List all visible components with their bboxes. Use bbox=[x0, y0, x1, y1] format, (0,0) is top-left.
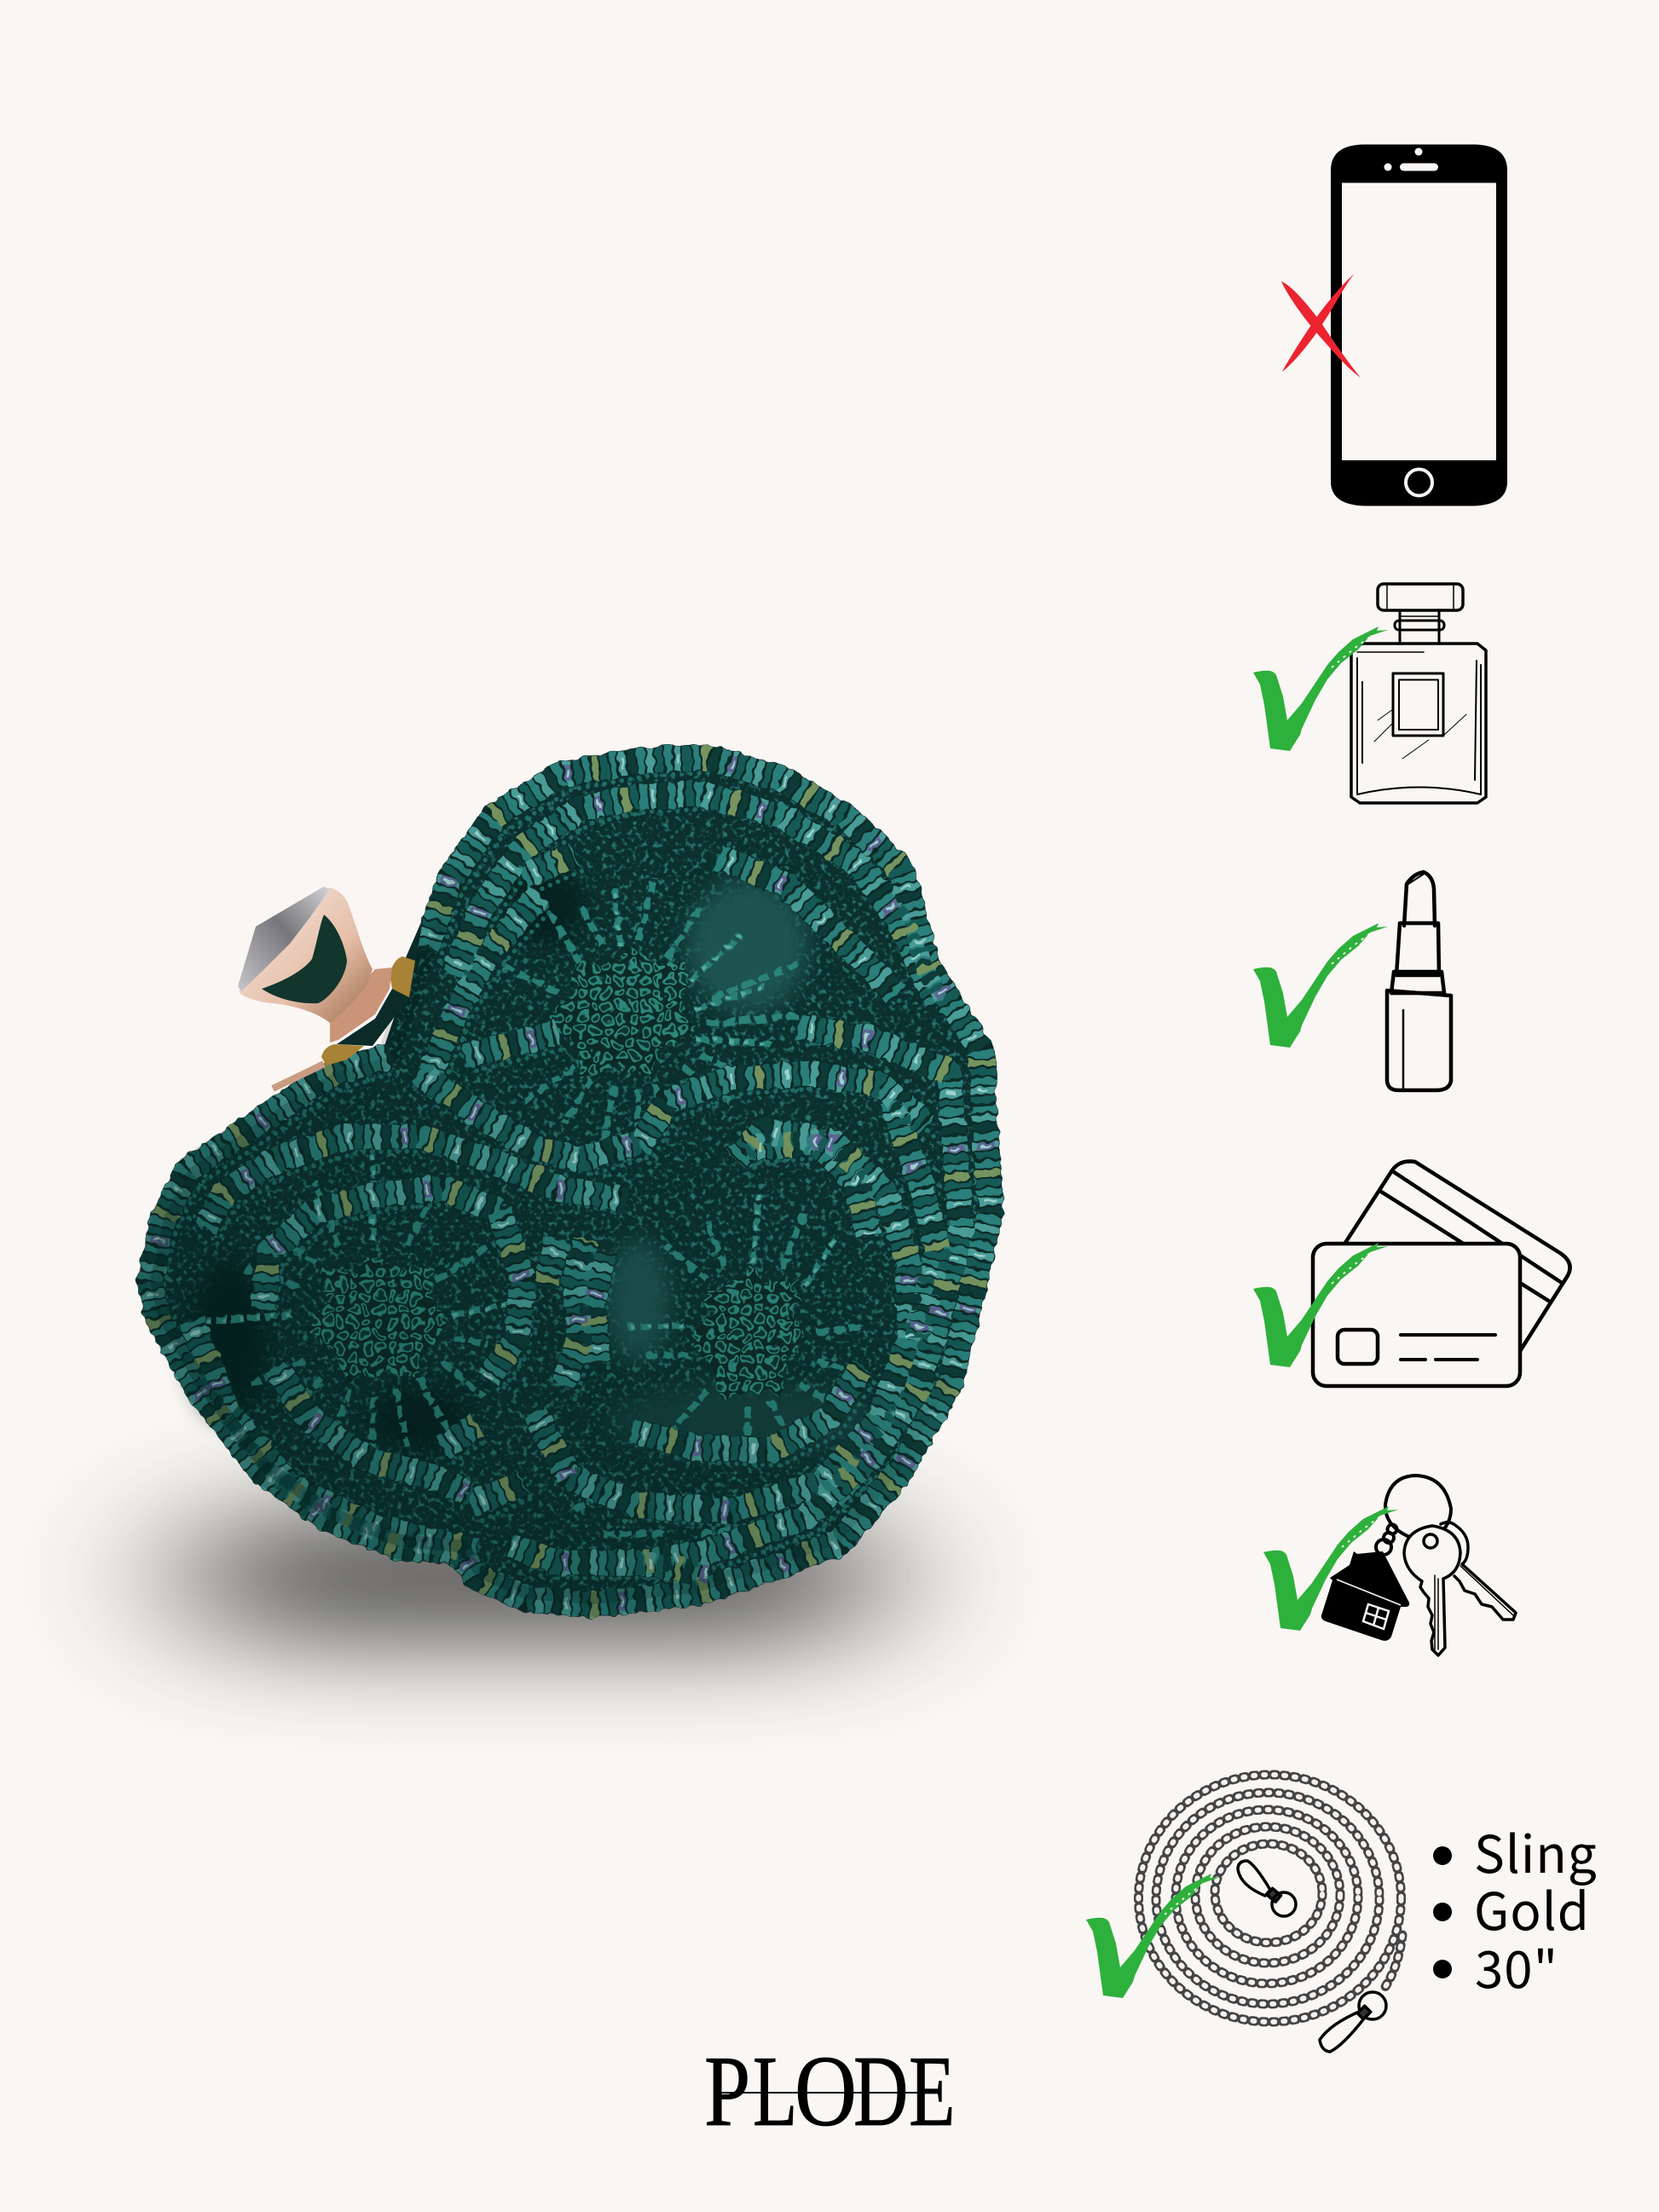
icon: green check (lipstick) bbox=[1253, 923, 1388, 1048]
bullet: 30 inches bbox=[1433, 1929, 1558, 2003]
crystal bbox=[238, 887, 330, 991]
clasp cup bbox=[239, 887, 373, 1023]
bullet: 30 inches: 30" bbox=[1475, 1929, 1558, 2003]
bullet: Gold: Gold bbox=[1474, 1871, 1590, 1945]
logo: PLODE: D bbox=[853, 2035, 908, 2147]
seed bead rosette: left flower bbox=[307, 1255, 451, 1384]
icon: coiled chain strap bbox=[1139, 1775, 1402, 2052]
strap specification list bbox=[1433, 1814, 1598, 2003]
outer clasp bbox=[1320, 1992, 1386, 2052]
icon: credit cards bbox=[1313, 1161, 1570, 1386]
icon: phone with red cross bbox=[1281, 145, 1507, 506]
icon: green check (keys) bbox=[1263, 1506, 1398, 1631]
seed bead rosettes bbox=[307, 946, 808, 1401]
bullet: Sling: Sling bbox=[1474, 1814, 1598, 1888]
seed bead lines bbox=[161, 772, 1003, 1620]
bag shadow bbox=[192, 1513, 874, 1641]
logo: PLODE: O bbox=[795, 2035, 857, 2147]
clasp wire bbox=[321, 956, 415, 1066]
clasp frame bbox=[273, 1064, 324, 1089]
icon: perfume bottle bbox=[1351, 584, 1486, 803]
icon: lipstick bbox=[1387, 872, 1451, 1090]
logo: PLODE: P bbox=[704, 2035, 750, 2147]
bead sprays bbox=[205, 877, 892, 1534]
icon: green check (chain) bbox=[1086, 1874, 1221, 1998]
product photo: beaded heart clutch bbox=[150, 757, 1003, 1620]
red cross bbox=[1281, 274, 1361, 378]
front key bbox=[1404, 1526, 1460, 1655]
key ring bbox=[1376, 1476, 1451, 1555]
icon: green check (perfume) bbox=[1253, 627, 1388, 751]
bead bands bbox=[150, 757, 991, 1604]
icon: house keys bbox=[1321, 1476, 1516, 1655]
icon: green check (cards) bbox=[1253, 1243, 1388, 1367]
logo: PLODE: E bbox=[909, 2035, 956, 2147]
shading bbox=[150, 757, 991, 1604]
seed bead rosette: top flower bbox=[549, 946, 698, 1079]
clasp reflection bbox=[262, 915, 347, 1003]
bag body bbox=[150, 757, 991, 1604]
clasp dark seat bbox=[337, 916, 424, 1046]
house fob bbox=[1321, 1551, 1409, 1641]
seed bead rosette: right flower bbox=[690, 1266, 808, 1401]
chain coils bbox=[1139, 1775, 1402, 2022]
inner clasp bbox=[1238, 1861, 1296, 1916]
bag body and beadwork bbox=[150, 757, 1003, 1620]
back key bbox=[1441, 1522, 1516, 1620]
clasp neck bbox=[330, 967, 392, 1042]
gold clasp knob with crystal bbox=[238, 887, 424, 1089]
logo: PLODE: L bbox=[753, 2036, 797, 2147]
phone bbox=[1331, 145, 1507, 506]
logo: PLODE bbox=[704, 2035, 956, 2147]
